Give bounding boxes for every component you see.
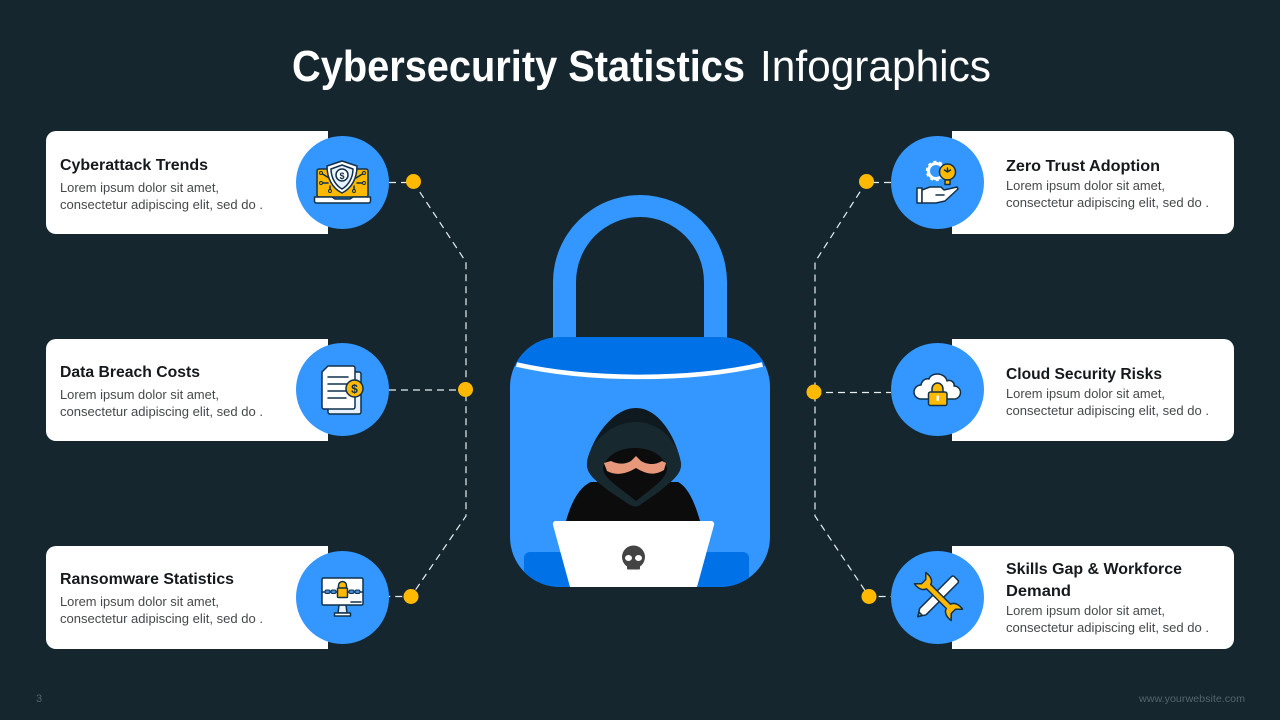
heading: Demand — [1006, 583, 1071, 600]
text block — [60, 387, 263, 419]
connector dots — [404, 174, 876, 604]
text block: consectetur adipiscing elit, sed do . — [60, 611, 263, 626]
padlock highlight curve — [516, 364, 762, 377]
icon: documents with dollar coin: $ — [351, 382, 358, 396]
icon: hand with gear and bulb — [891, 136, 984, 229]
icon: monitor with lock — [296, 551, 389, 644]
illustration: padlock with hacker — [510, 195, 770, 590]
padlock body — [510, 337, 770, 587]
heading: Cyberattack Trends — [60, 157, 208, 174]
skull logo — [622, 546, 645, 570]
hacker — [566, 408, 700, 521]
heading: Data Breach Costs — [60, 364, 200, 381]
desk — [524, 552, 749, 590]
text block: consectetur adipiscing elit, sed do . — [60, 197, 263, 212]
icon: laptop with shield: $ — [339, 171, 345, 181]
heading: Ransomware Statistics — [60, 571, 234, 588]
text block — [1006, 386, 1209, 418]
text block: Lorem ipsum dolor sit amet, — [1006, 178, 1165, 193]
laptop — [553, 521, 714, 587]
heading: Zero Trust Adoption — [1006, 158, 1160, 175]
text block: consectetur adipiscing elit, sed do . — [1006, 620, 1209, 635]
text block: consectetur adipiscing elit, sed do . — [1006, 403, 1209, 418]
page number: 3 — [36, 693, 42, 705]
text block: Lorem ipsum dolor sit amet, — [1006, 603, 1165, 618]
heading — [1006, 561, 1182, 600]
title: Infographics — [760, 42, 991, 91]
website url: www.yourwebsite.com — [1138, 694, 1245, 705]
text block: Lorem ipsum dolor sit amet, — [1006, 386, 1165, 401]
text block: Lorem ipsum dolor sit amet, — [60, 387, 219, 402]
padlock top band — [510, 337, 770, 377]
connector lines — [389, 182, 891, 596]
text block — [1006, 603, 1209, 635]
panel: zero trust adoption — [952, 131, 1234, 234]
icon: documents with dollar coin — [296, 343, 389, 436]
text block — [60, 180, 263, 212]
icon: laptop with shield — [296, 136, 389, 229]
text block: Lorem ipsum dolor sit amet, — [60, 594, 219, 609]
panel: cloud security risks — [952, 339, 1234, 441]
padlock shackle — [553, 195, 727, 345]
heading: Cloud Security Risks — [1006, 366, 1162, 383]
title: Cybersecurity Statistics — [292, 42, 745, 91]
panel: skills gap and workforce demand — [952, 546, 1234, 649]
text block: Lorem ipsum dolor sit amet, — [60, 180, 219, 195]
panel: cyberattack trends — [46, 131, 328, 234]
text block: consectetur adipiscing elit, sed do . — [60, 404, 263, 419]
text block — [1006, 178, 1209, 210]
text block: consectetur adipiscing elit, sed do . — [1006, 195, 1209, 210]
text block — [60, 594, 263, 626]
icon: wrench and pencil — [891, 551, 984, 644]
icon: cloud with padlock — [891, 343, 984, 436]
panel: data breach costs — [46, 339, 328, 441]
panel: ransomware statistics — [46, 546, 328, 649]
heading: Skills Gap & Workforce — [1006, 561, 1182, 578]
